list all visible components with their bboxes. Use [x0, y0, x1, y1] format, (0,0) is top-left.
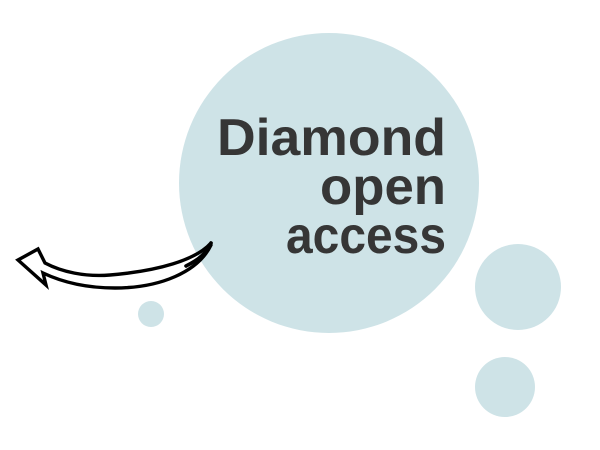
title: open: [320, 158, 446, 216]
arrow: [18, 243, 211, 288]
small circle, left: [138, 301, 164, 327]
lower circle, right: [475, 357, 535, 417]
medium circle, right: [475, 244, 561, 330]
title: [217, 109, 446, 265]
title: Diamond: [217, 109, 446, 167]
title: access: [286, 207, 446, 265]
main circle: [179, 33, 479, 333]
